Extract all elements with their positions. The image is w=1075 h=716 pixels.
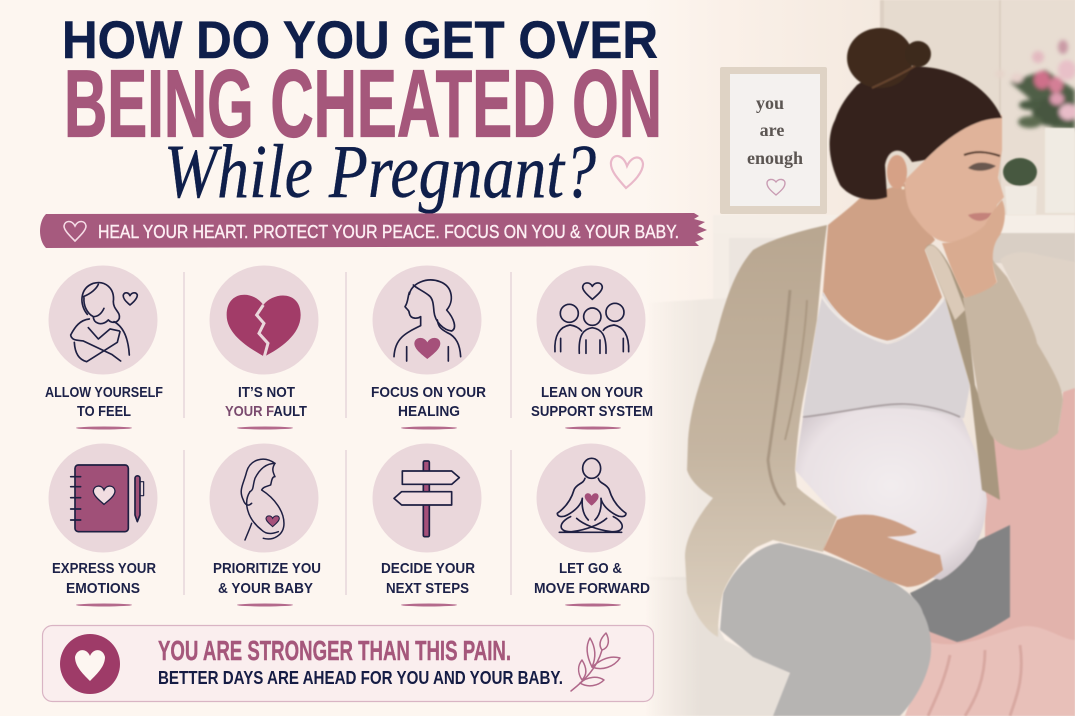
plant pot xyxy=(1003,158,1037,215)
label: EXPRESS YOUR xyxy=(52,560,156,577)
label: ALLOW YOURSELF xyxy=(45,384,163,401)
label: TO FEEL xyxy=(77,403,131,420)
wall panels xyxy=(880,0,1075,220)
belly xyxy=(795,408,987,580)
icon: leaf sprig xyxy=(571,633,620,691)
face and hair xyxy=(830,28,1004,243)
under-bust crease xyxy=(803,404,960,417)
label: NEXT STEPS xyxy=(386,580,469,597)
framed print: enough xyxy=(747,148,803,168)
title xyxy=(62,11,662,214)
label: DECIDE YOUR xyxy=(381,560,475,577)
sofa xyxy=(645,252,1075,716)
tank top xyxy=(803,292,970,430)
hand on belly xyxy=(823,515,943,587)
panel: express your emotions xyxy=(48,444,158,606)
icon: woman hugging herself xyxy=(71,283,137,362)
label: LET GO & xyxy=(559,560,622,577)
callout subtext: BETTER DAYS ARE AHEAD FOR YOU AND YOUR BABY. xyxy=(158,668,563,688)
icon: signpost xyxy=(394,461,459,537)
photo wall xyxy=(640,0,1075,716)
footer callout xyxy=(42,626,654,702)
label: YOUR FAULT xyxy=(225,403,307,420)
icon: title heart xyxy=(611,156,643,188)
panel: prioritize you and your baby xyxy=(210,444,321,606)
title line 2: BEING CHEATED ON xyxy=(64,50,662,158)
panel: allow yourself to feel xyxy=(45,266,163,430)
icon: three people and a heart xyxy=(555,283,629,353)
panel: let go and move forward xyxy=(534,444,650,606)
label: HEALING xyxy=(398,403,460,420)
icon: broken heart xyxy=(227,295,301,357)
brush banner xyxy=(40,213,707,248)
right cardigan xyxy=(925,244,1063,500)
vase xyxy=(1045,128,1075,213)
title line 1: HOW DO YOU GET OVER xyxy=(62,11,658,70)
flowers xyxy=(995,40,1075,130)
framed print: you xyxy=(756,93,784,113)
label: MOVE FORWARD xyxy=(534,580,650,597)
label: PRIORITIZE YOU xyxy=(213,560,321,577)
label: & YOUR BABY xyxy=(218,580,313,597)
icon: white heart in circle xyxy=(60,634,120,694)
panel: support system xyxy=(531,266,653,430)
label: SUPPORT SYSTEM xyxy=(531,403,653,420)
hand on chin xyxy=(942,200,1005,298)
framed print xyxy=(720,67,827,214)
framed print: are xyxy=(760,120,784,140)
panel: focus on your healing xyxy=(371,266,486,430)
icon: meditating figure xyxy=(557,458,626,532)
icon: banner heart xyxy=(64,222,86,241)
dark back leg xyxy=(910,525,1010,642)
icon: woman with heart xyxy=(394,280,461,361)
photo: pregnant woman on a sofa xyxy=(640,0,1075,716)
column dividers xyxy=(184,272,511,595)
shelf xyxy=(713,215,1075,299)
icon: pregnant woman silhouette xyxy=(241,459,284,540)
label: IT’S NOT xyxy=(238,384,295,401)
trousers xyxy=(720,543,931,716)
icon: journal and pen xyxy=(71,465,144,532)
banner text: HEAL YOUR HEART. PROTECT YOUR PEACE. FOCUS ON YOU & YOUR BABY. xyxy=(98,222,679,242)
panel: decide your next steps xyxy=(372,444,482,606)
label: LEAN ON YOUR xyxy=(541,384,643,401)
neck and chest xyxy=(823,183,942,342)
blanket xyxy=(905,388,1075,716)
title line 3: While Pregnant? xyxy=(164,130,596,214)
label: FOCUS ON YOUR xyxy=(371,384,486,401)
label: EMOTIONS xyxy=(66,580,140,597)
left cardigan xyxy=(685,225,837,637)
panel: not your fault xyxy=(210,266,318,430)
callout heading: YOU ARE STRONGER THAN THIS PAIN. xyxy=(158,635,511,666)
